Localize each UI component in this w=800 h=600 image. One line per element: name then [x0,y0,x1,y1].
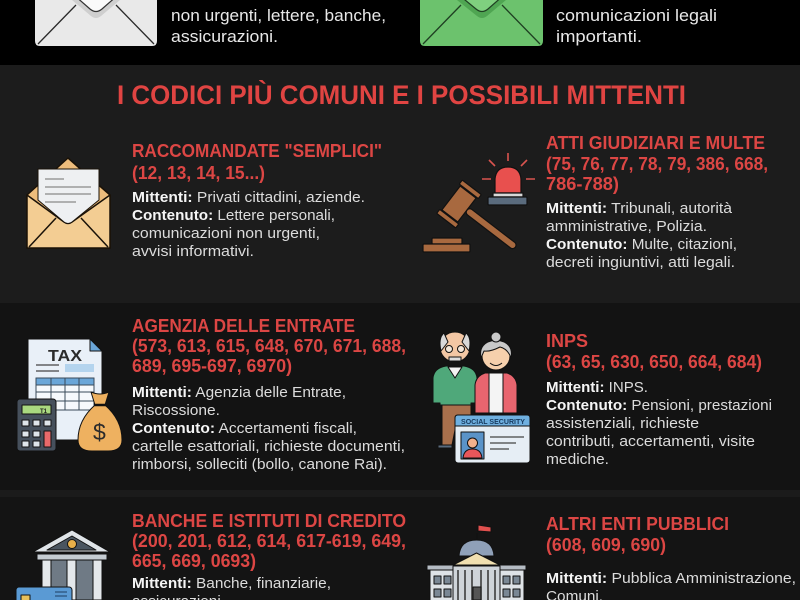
text: atti heading: (75, 76, 77, 78, 79, 386, 668, [546,154,768,174]
text: agenzia heading: AGENZIA DELLE ENTRATE [132,316,355,336]
text: banche body [132,575,331,600]
text: agenzia body: Contenuto: Accertamenti fiscali, [132,420,357,437]
text: inps body: mediche. [546,451,609,468]
text: regular mail description: assicurazioni. [171,27,278,46]
icon: tax form, calculator and money bag: T1 [40,409,48,415]
icon: tax form, calculator and money bag: $ [93,419,106,445]
text: agenzia heading [132,316,406,376]
icon: bank and credit card [16,530,110,600]
icon: tax form, calculator and money bag: TAX [48,348,82,365]
text: inps body: contributi, accertamenti, visite [546,433,755,450]
text: inps body [546,379,772,468]
text: altri enti body: Mittenti: Pubblica Amministrazione, [546,570,796,587]
text: atti body: Contenuto: Multe, citazioni, [546,236,737,253]
text: inps body: assistenziali, richieste [546,415,699,432]
icon: gavel and siren [423,153,535,264]
text: regular mail description: non urgenti, lettere, banche, [171,6,386,25]
text: inps body: Mittenti: INPS. [546,379,648,396]
text: agenzia body: Mittenti: Agenzia delle Entrate, [132,384,346,401]
text: regular mail description [171,6,386,46]
text: raccomandate heading: RACCOMANDATE "SEMPLICI" [132,141,382,161]
text: banche heading: 665, 669, 0693) [132,551,256,571]
text: raccomandate heading [132,141,382,183]
text: green mail description [556,6,717,46]
text: inps body: Contenuto: Pensioni, prestazioni [546,397,772,414]
text: raccomandate heading: (12, 13, 14, 15...) [132,163,265,183]
text: atti body: amministrative, Polizia. [546,218,707,235]
panel: inps [433,331,772,468]
text: atti body: Mittenti: Tribunali, autorità [546,200,733,217]
panel: altri enti pubblici [427,514,796,600]
panel: banche e istituti di credito [16,511,406,600]
icon: open envelope with letter [27,158,110,248]
text: raccomandate body [132,189,365,260]
text: banche heading [132,511,406,571]
text: banche heading: BANCHE E ISTITUTI DI CREDITO [132,511,406,531]
text: green mail description: comunicazioni legali [556,6,717,25]
text: green mail description: importanti. [556,27,642,46]
icon: green envelope [420,0,543,46]
text: inps heading [546,331,762,372]
text: inps heading: (63, 65, 630, 650, 664, 684) [546,352,762,372]
text: agenzia body [132,384,405,473]
text: agenzia body: rimborsi, solleciti (bollo, canone Rai). [132,456,387,473]
panel: agenzia delle entrate [17,316,406,473]
text: altri enti heading [546,514,729,555]
icon: elderly couple with social security card: SOCIAL SECURITY [461,419,525,426]
text: agenzia body: cartelle esattoriali, richieste documenti, [132,438,405,455]
text: atti body [546,200,737,271]
title: I CODICI PIÙ COMUNI E I POSSIBILI MITTENTI [117,79,686,110]
panel: raccomandate semplici [27,141,382,260]
text: agenzia heading: (573, 613, 615, 648, 670, 671, 688, [132,336,406,356]
text: inps heading: INPS [546,331,588,351]
text: altri enti heading: ALTRI ENTI PUBBLICI [546,514,729,534]
text: atti heading: ATTI GIUDIZIARI E MULTE [546,133,765,153]
text: raccomandate body: comunicazioni non urgenti, [132,225,320,242]
text: altri enti heading: (608, 609, 690) [546,535,666,555]
panel: atti giudiziari e multe [423,133,768,271]
icon: elderly couple with social security card [433,332,530,463]
text: altri enti body [546,570,796,600]
text: raccomandate body: avvisi informativi. [132,243,254,260]
icon: government building [427,525,526,600]
text: agenzia body: Riscossione. [132,402,220,419]
icon: white envelope [35,0,157,46]
text: raccomandate body: Mittenti: Privati cittadini, aziende. [132,189,365,206]
text: banche heading: (200, 201, 612, 614, 617-619, 649, [132,531,406,551]
text: atti heading: 786-788) [546,174,619,194]
text: raccomandate body: Contenuto: Lettere personali, [132,207,335,224]
text: atti heading [546,133,768,194]
text: agenzia heading: 689, 695-697, 6970) [132,356,292,376]
icon: tax form, calculator and money bag [17,339,122,451]
text: banche body: Mittenti: Banche, finanziarie, [132,575,331,592]
text: atti body: decreti ingiuntivi, atti legali. [546,254,735,271]
